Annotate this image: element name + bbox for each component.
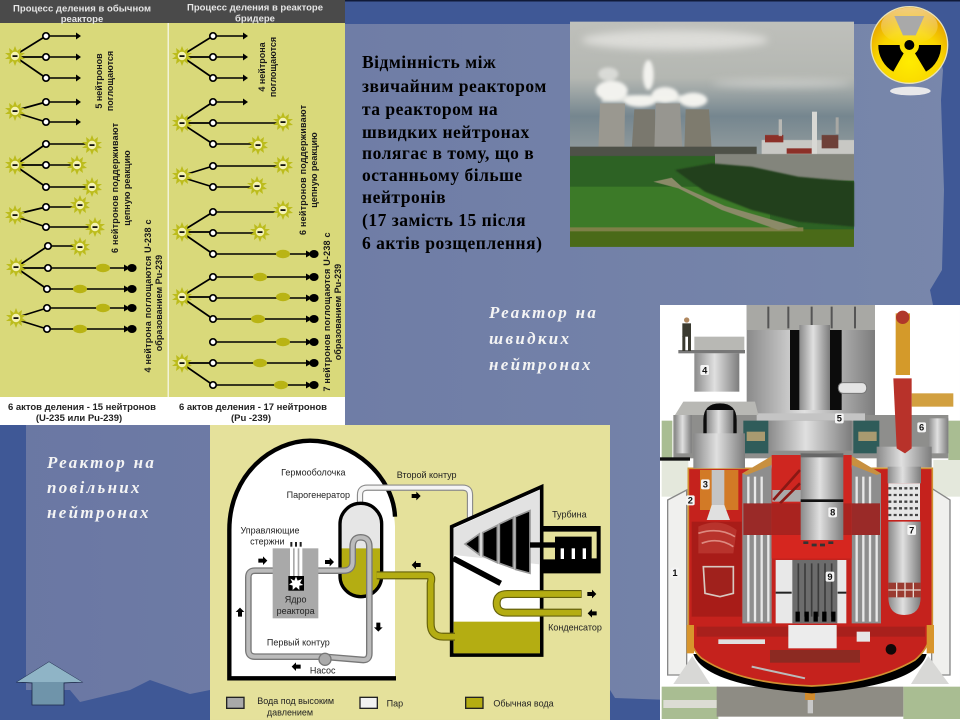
- description text: нейтронів: [362, 187, 446, 207]
- vertical chart labels: [94, 37, 343, 392]
- right column: breeder reactor trees: [184, 36, 310, 385]
- number tags: [671, 365, 926, 582]
- caption: fast reactor: Реактор на: [488, 303, 598, 322]
- diagram labels: [241, 467, 602, 676]
- vertical chart labels: цепную реакцию: [122, 150, 132, 226]
- diagram: thermal reactor scheme: [210, 425, 610, 720]
- chart footer: (U-235 или Pu-239): [36, 413, 122, 424]
- steam generator: [340, 503, 382, 597]
- diagram labels: Турбина: [552, 509, 587, 519]
- containment dome: [229, 441, 395, 678]
- steam pipe: [360, 488, 470, 523]
- description text: [362, 52, 547, 253]
- vertical chart labels: поглощаются: [268, 37, 278, 97]
- diagram labels: Гермооболочка: [281, 467, 345, 477]
- caption: slow reactor: повільних: [47, 478, 142, 497]
- chart headings: реакторе: [61, 14, 103, 25]
- diagram labels: реактора: [277, 606, 315, 616]
- caption: fast reactor: [488, 303, 598, 374]
- top column: [747, 305, 875, 415]
- legend: Пар: [387, 698, 403, 708]
- turbine housing: [452, 487, 542, 655]
- flow arrows: [236, 492, 597, 671]
- side fuel columns: [742, 456, 881, 623]
- vertical chart labels: 6 нейтронов поддерживают: [110, 122, 120, 253]
- central column: [801, 453, 843, 545]
- description text: Відмінність між: [362, 52, 496, 72]
- diagram labels: Управляющие: [241, 525, 299, 535]
- description text: останньому більше: [362, 165, 523, 185]
- number tags: 6: [919, 423, 924, 433]
- lower plenum details: [687, 625, 934, 678]
- chart footer: [8, 402, 327, 424]
- number tags: 4: [702, 365, 708, 375]
- chart headings: Процесс деления в обычном: [13, 4, 151, 14]
- diagram labels: Второй контур: [397, 470, 457, 480]
- legend: Вода под высоким: [257, 696, 334, 706]
- caption: slow reactor: Реактор на: [46, 453, 156, 472]
- central red block: [772, 455, 852, 558]
- chart: fission process comparison: [0, 0, 345, 425]
- photo: nuclear power plant: [570, 22, 854, 247]
- reactor buildings: [762, 112, 854, 160]
- operator figure: [682, 317, 691, 351]
- vessel underside: [693, 654, 927, 693]
- description text: полягає в тому, що в: [362, 143, 534, 163]
- diagram labels: Первый контур: [267, 638, 330, 648]
- number tags: 7: [909, 525, 914, 535]
- description text: та реактором на: [362, 99, 498, 119]
- diagram labels: Парогенератор: [287, 490, 350, 500]
- diagram labels: Ядро: [285, 595, 307, 605]
- caption: fast reactor: нейтронах: [489, 355, 593, 374]
- chart footer: (Pu -239): [231, 413, 271, 424]
- number tags: 2: [688, 496, 693, 506]
- description text: звичайним реактором: [362, 76, 547, 96]
- left column symbols: [5, 32, 137, 333]
- description text: швидких нейтронах: [362, 122, 530, 142]
- top blade: [894, 16, 924, 35]
- turbine blades: [465, 511, 530, 573]
- upper deck: [660, 402, 948, 467]
- caption: slow reactor: [46, 453, 156, 522]
- number tags: 8: [830, 508, 835, 518]
- diagram labels: Насос: [310, 666, 336, 676]
- reactor core: [273, 542, 318, 618]
- feedwater pipe: [377, 575, 456, 637]
- left column: ordinary reactor trees: [17, 36, 128, 329]
- legend: [227, 696, 554, 717]
- vertical chart labels: 4 нейтрона: [257, 41, 267, 92]
- cooling towers: [598, 103, 712, 150]
- legend: давлением: [267, 707, 313, 717]
- reflection: [890, 87, 931, 95]
- legend: Обычная вода: [493, 698, 554, 708]
- primary circuit: [248, 537, 369, 665]
- caption: fast reactor: швидких: [489, 329, 571, 348]
- green concrete blocks: [662, 421, 960, 719]
- chart headings: бридере: [235, 14, 275, 24]
- icon: radiation symbol: [871, 7, 948, 95]
- number tags: 1: [672, 568, 678, 578]
- number tags: 9: [827, 572, 833, 582]
- clouds and steam: [582, 30, 852, 107]
- number tags: 5: [837, 414, 842, 424]
- vertical chart labels: цепную реакцию: [309, 132, 319, 208]
- vertical chart labels: образованием Pu-239: [333, 264, 343, 360]
- icon: back arrow button: [17, 662, 82, 705]
- condenser coil: [497, 594, 582, 613]
- trefoil blades: [878, 40, 941, 72]
- vertical chart labels: образованием Pu-239: [154, 255, 164, 351]
- primary pump: [692, 470, 742, 617]
- caption: slow reactor: нейтронах: [47, 503, 151, 522]
- chart headings: Процесс деления в реакторе: [187, 2, 323, 14]
- heat exchanger: [888, 467, 921, 615]
- diagram labels: стержни: [250, 537, 285, 547]
- vertical chart labels: 4 нейтрона поглощаются U-238 с: [143, 220, 153, 372]
- left pump head: [678, 337, 745, 468]
- ground and trees: [570, 147, 854, 247]
- right column symbols: [172, 32, 319, 389]
- bottom foundation: [663, 685, 903, 717]
- vertical chart labels: поглощаются: [105, 51, 115, 111]
- diagram labels: Конденсатор: [548, 622, 602, 632]
- outer walls: [668, 488, 950, 675]
- support feet: [673, 656, 949, 684]
- chart footer: 6 актов деления - 17 нейтронов: [179, 402, 327, 413]
- intermediate loop piping: [893, 311, 953, 453]
- description text: (17 замість 15 після: [362, 210, 526, 230]
- main vessel: [688, 468, 932, 686]
- vertical chart labels: 5 нейтронов: [94, 53, 104, 109]
- generator: [530, 526, 601, 573]
- vertical chart labels: 6 нейтронов поддерживают: [298, 104, 308, 235]
- vertical chart labels: 7 нейтронов поглощаются U-238 с: [322, 232, 332, 392]
- diagram: fast reactor cross-section: [660, 305, 960, 720]
- chart footer: 6 актов деления - 15 нейтронов: [8, 402, 156, 413]
- reactor core: [776, 560, 846, 623]
- description text: 6 актів розщеплення): [362, 233, 542, 253]
- gloss highlight: [881, 8, 938, 44]
- number tags: 3: [703, 480, 708, 490]
- chart headings: [13, 2, 323, 25]
